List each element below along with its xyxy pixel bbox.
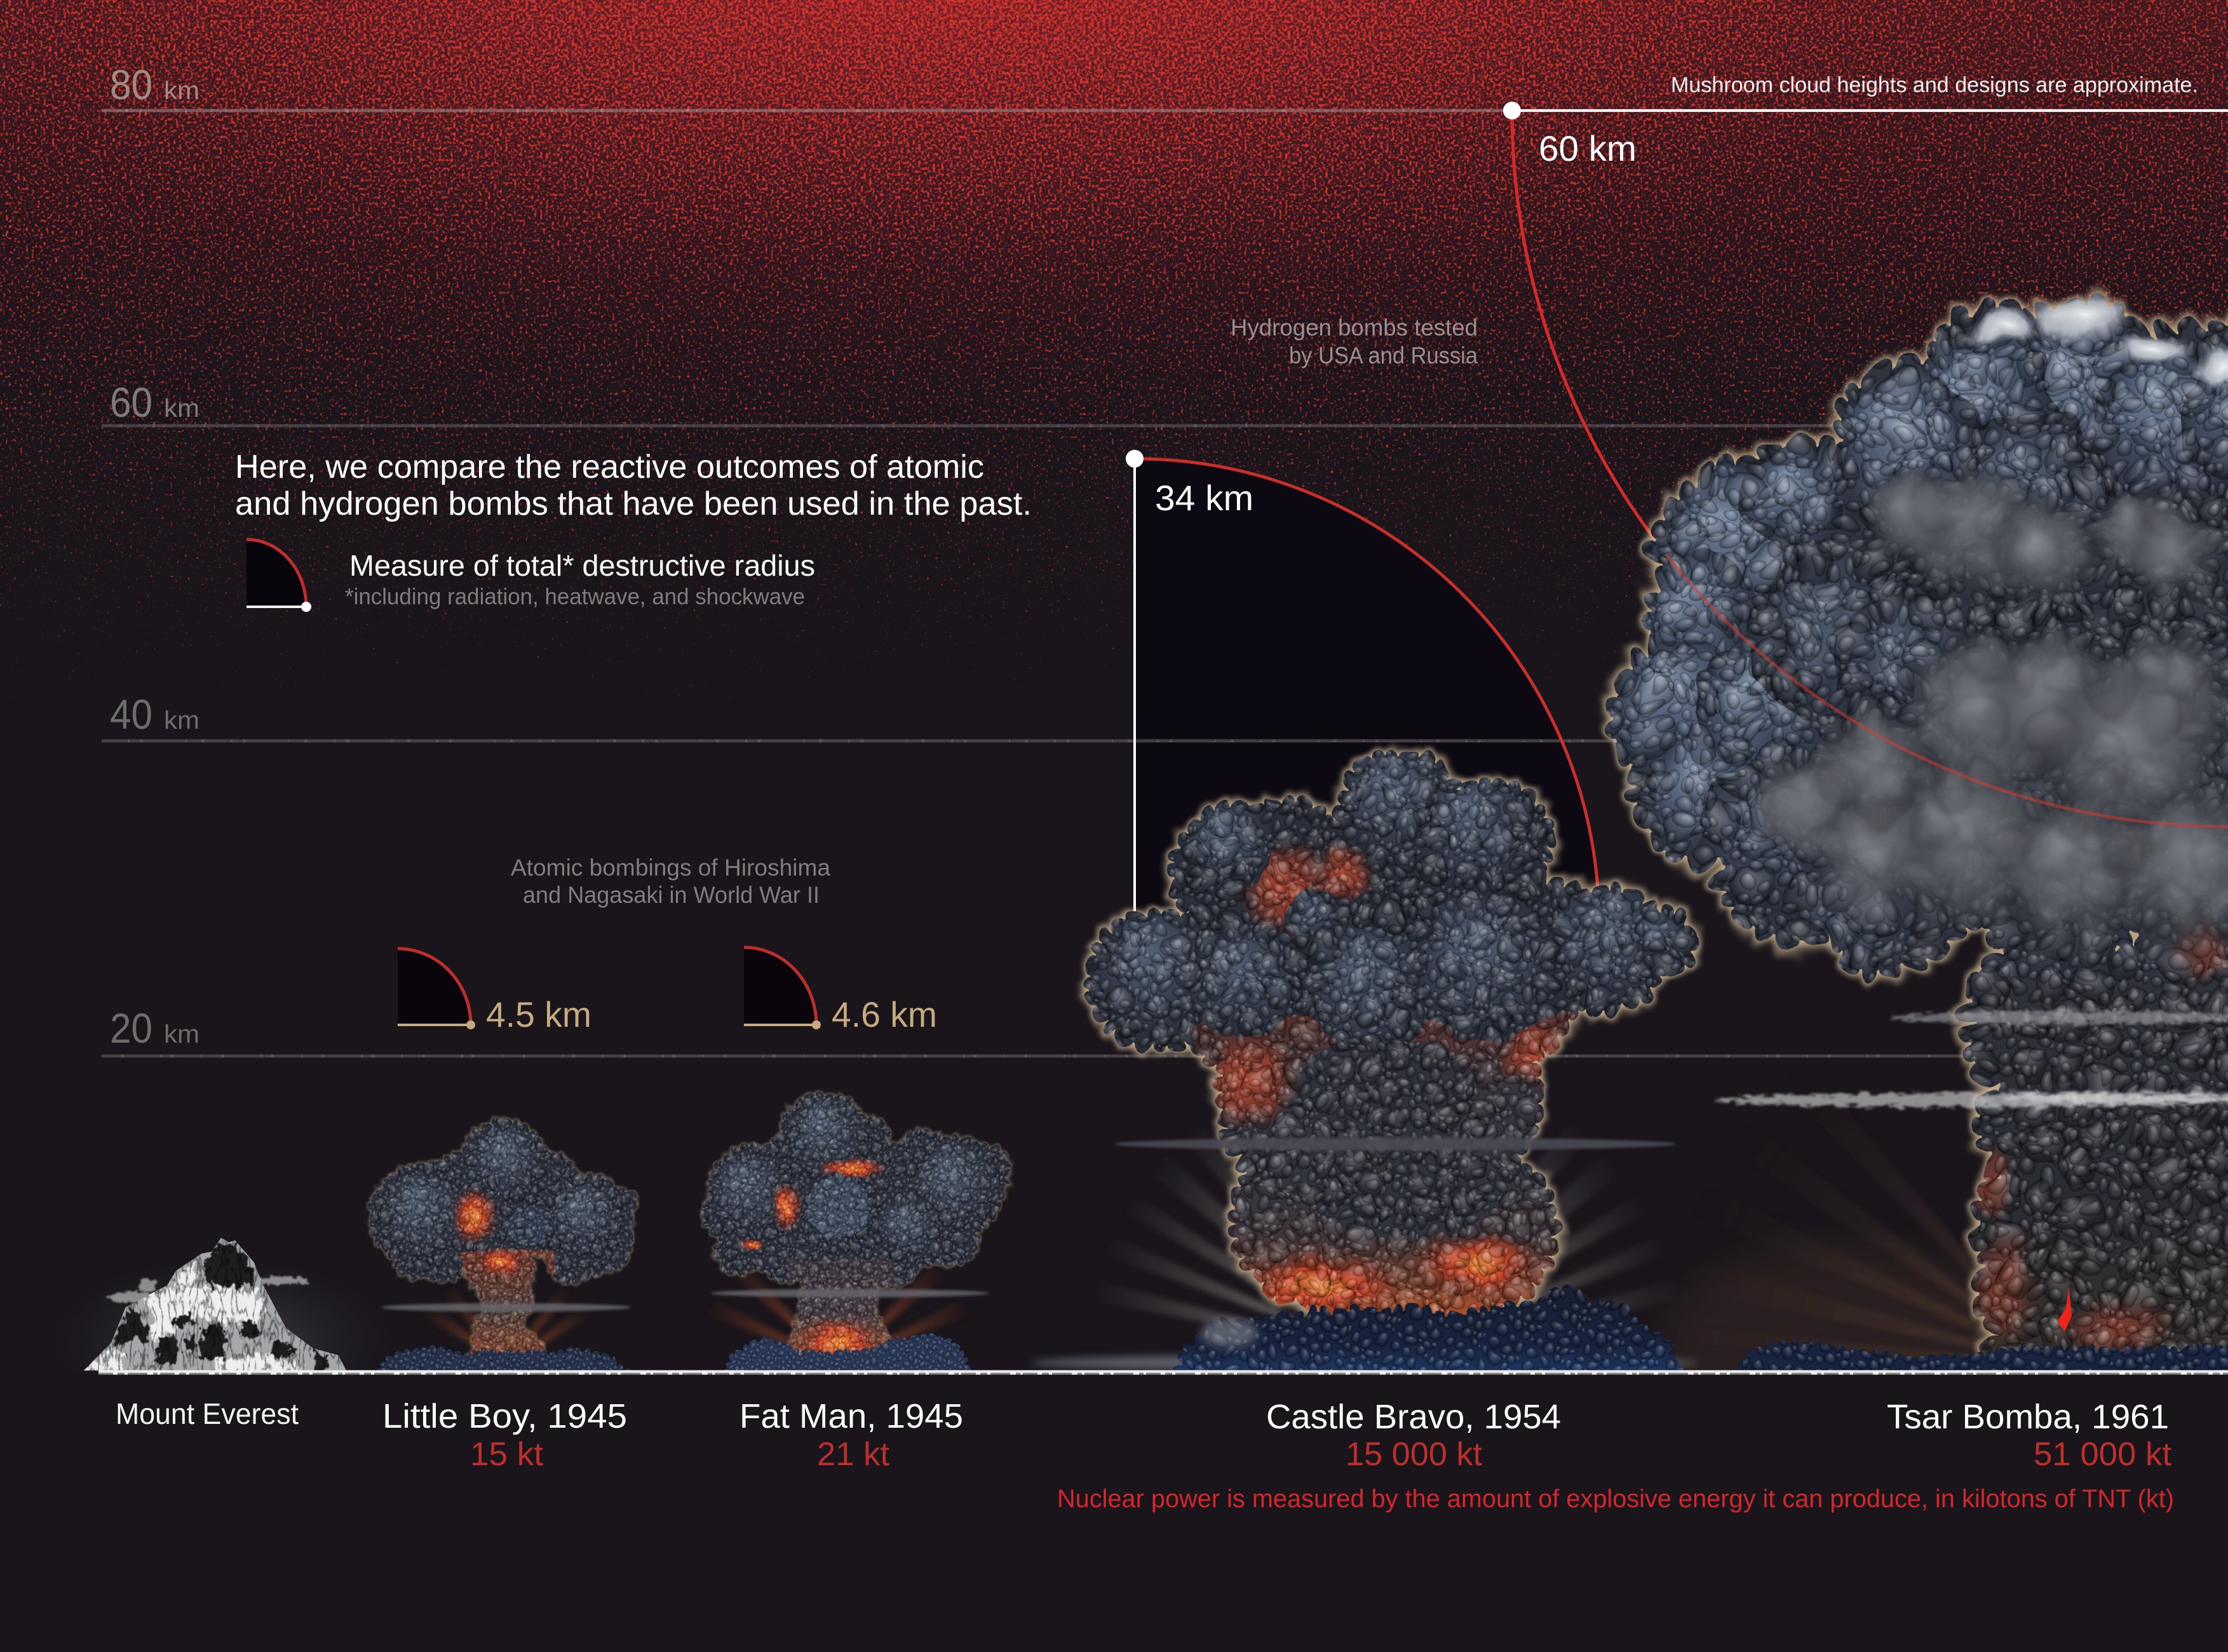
mountain glow <box>51 1258 394 1423</box>
label: Castle Bravo: Castle Bravo, 1954 <box>1266 1398 1561 1436</box>
smoke band: Fat Man <box>710 1289 989 1297</box>
ground line <box>98 1372 2228 1374</box>
caption: atomic bombings: Atomic bombings of Hiroshima <box>511 855 830 881</box>
label: Tsar Bomba: Tsar Bomba, 1961 <box>1887 1398 2169 1436</box>
label: 40 km: km <box>164 707 199 735</box>
ground blast: Tsar Bomba <box>1734 1341 2228 1370</box>
label: 80 km: 80 <box>110 61 152 108</box>
label: 60 km: km <box>164 395 199 423</box>
label: Mount Everest: Mount Everest <box>116 1397 299 1430</box>
label: 40 km: 40 <box>110 691 152 738</box>
label: 20 km: 20 <box>110 1005 152 1052</box>
caption: hydrogen bombs: by USA and Russia <box>1289 342 1478 369</box>
mountain: Mount Everest <box>76 1233 356 1376</box>
label: Little Boy: 15 kt <box>470 1436 544 1473</box>
legend title: Measure of total* destructive radius <box>349 549 815 582</box>
label: Castle Bravo radius: 34 km <box>1155 478 1253 518</box>
label: 20 km: km <box>164 1020 199 1048</box>
radius: Little Boy: 4.5 km <box>486 994 591 1034</box>
mushroom cloud: Little Boy <box>348 1101 661 1379</box>
mushroom cloud: Tsar Bomba <box>1563 256 2228 1379</box>
note: kilotons: Nuclear power is measured by the amount of explosive energy it can produce, in kilotons of TNT (kt) <box>1057 1485 2174 1513</box>
smoke bands: Tsar Bomba <box>1712 1011 2228 1107</box>
caption: hydrogen bombs: Hydrogen bombs tested <box>1231 315 1478 341</box>
label: 80 km <box>110 61 199 108</box>
label: Fat Man <box>739 1397 963 1473</box>
soft grey smoke over Tsar Bomba <box>1748 459 2228 968</box>
ground blast: Fat Man <box>708 1322 985 1379</box>
label: Tsar Bomba radius: 60 km <box>1539 128 1637 168</box>
note: approximate heights: Mushroom cloud heights and designs are approximate. <box>1671 73 2198 97</box>
label: 20 km <box>110 1005 199 1052</box>
lava glint <box>2058 1287 2072 1332</box>
mushroom cloud: Fat Man <box>682 1073 1037 1379</box>
label: 60 km: 60 <box>110 379 152 426</box>
radius: Fat Man: 4.6 km <box>832 994 937 1034</box>
intro text <box>235 449 1032 522</box>
icon: radius quadrant <box>246 539 311 612</box>
label: 60 km <box>110 379 199 426</box>
label: Castle Bravo: 15 000 kt <box>1346 1436 1483 1473</box>
caption: hydrogen bombs <box>1231 315 1478 369</box>
label: Fat Man: 21 kt <box>817 1436 890 1473</box>
label: Little Boy <box>382 1397 627 1473</box>
caption: atomic bombings: and Nagasaki in World War II <box>523 882 820 908</box>
radius line and arc: Tsar Bomba 60 km <box>1503 102 2228 827</box>
radius line and arc: Castle Bravo 34 km <box>1126 450 1599 923</box>
label: 40 km <box>110 691 199 738</box>
cover below ground <box>0 1374 2228 1652</box>
caption: atomic bombings <box>511 855 830 908</box>
intro text: Here, we compare the reactive outcomes of atomic <box>235 449 984 485</box>
smoke band: Little Boy <box>381 1303 631 1311</box>
label: Tsar Bomba <box>1887 1398 2172 1473</box>
altitude labels <box>110 61 199 1052</box>
legend footnote: *including radiation, heatwave, and shockwave <box>345 583 805 609</box>
label: Tsar Bomba: 51 000 kt <box>2034 1436 2172 1473</box>
ground blast: Little Boy <box>362 1336 647 1379</box>
intro text: and hydrogen bombs that have been used in the past. <box>235 485 1032 522</box>
mushroom cloud: Castle Bravo <box>1051 717 1734 1386</box>
altitude grid lines <box>102 111 2228 1056</box>
label: 80 km: km <box>164 77 199 105</box>
ground blast: Castle Bravo <box>1030 1272 1705 1379</box>
radius: Little Boy <box>398 949 591 1034</box>
label: Fat Man: Fat Man, 1945 <box>739 1397 963 1435</box>
radius: Fat Man <box>744 947 937 1034</box>
ground light rays <box>421 1060 2060 1442</box>
faint arc over Tsar Bomba cloud <box>1666 554 2228 827</box>
label: Castle Bravo <box>1266 1398 1561 1473</box>
destructive radius quadrant: Castle Bravo fill <box>1135 459 1599 923</box>
legend: destructive radius <box>246 539 815 612</box>
mushroom clouds, drawn in scaled units <box>348 256 2228 1442</box>
smoke band: Castle Bravo <box>1114 1137 1677 1151</box>
label: Little Boy: Little Boy, 1945 <box>382 1397 627 1435</box>
